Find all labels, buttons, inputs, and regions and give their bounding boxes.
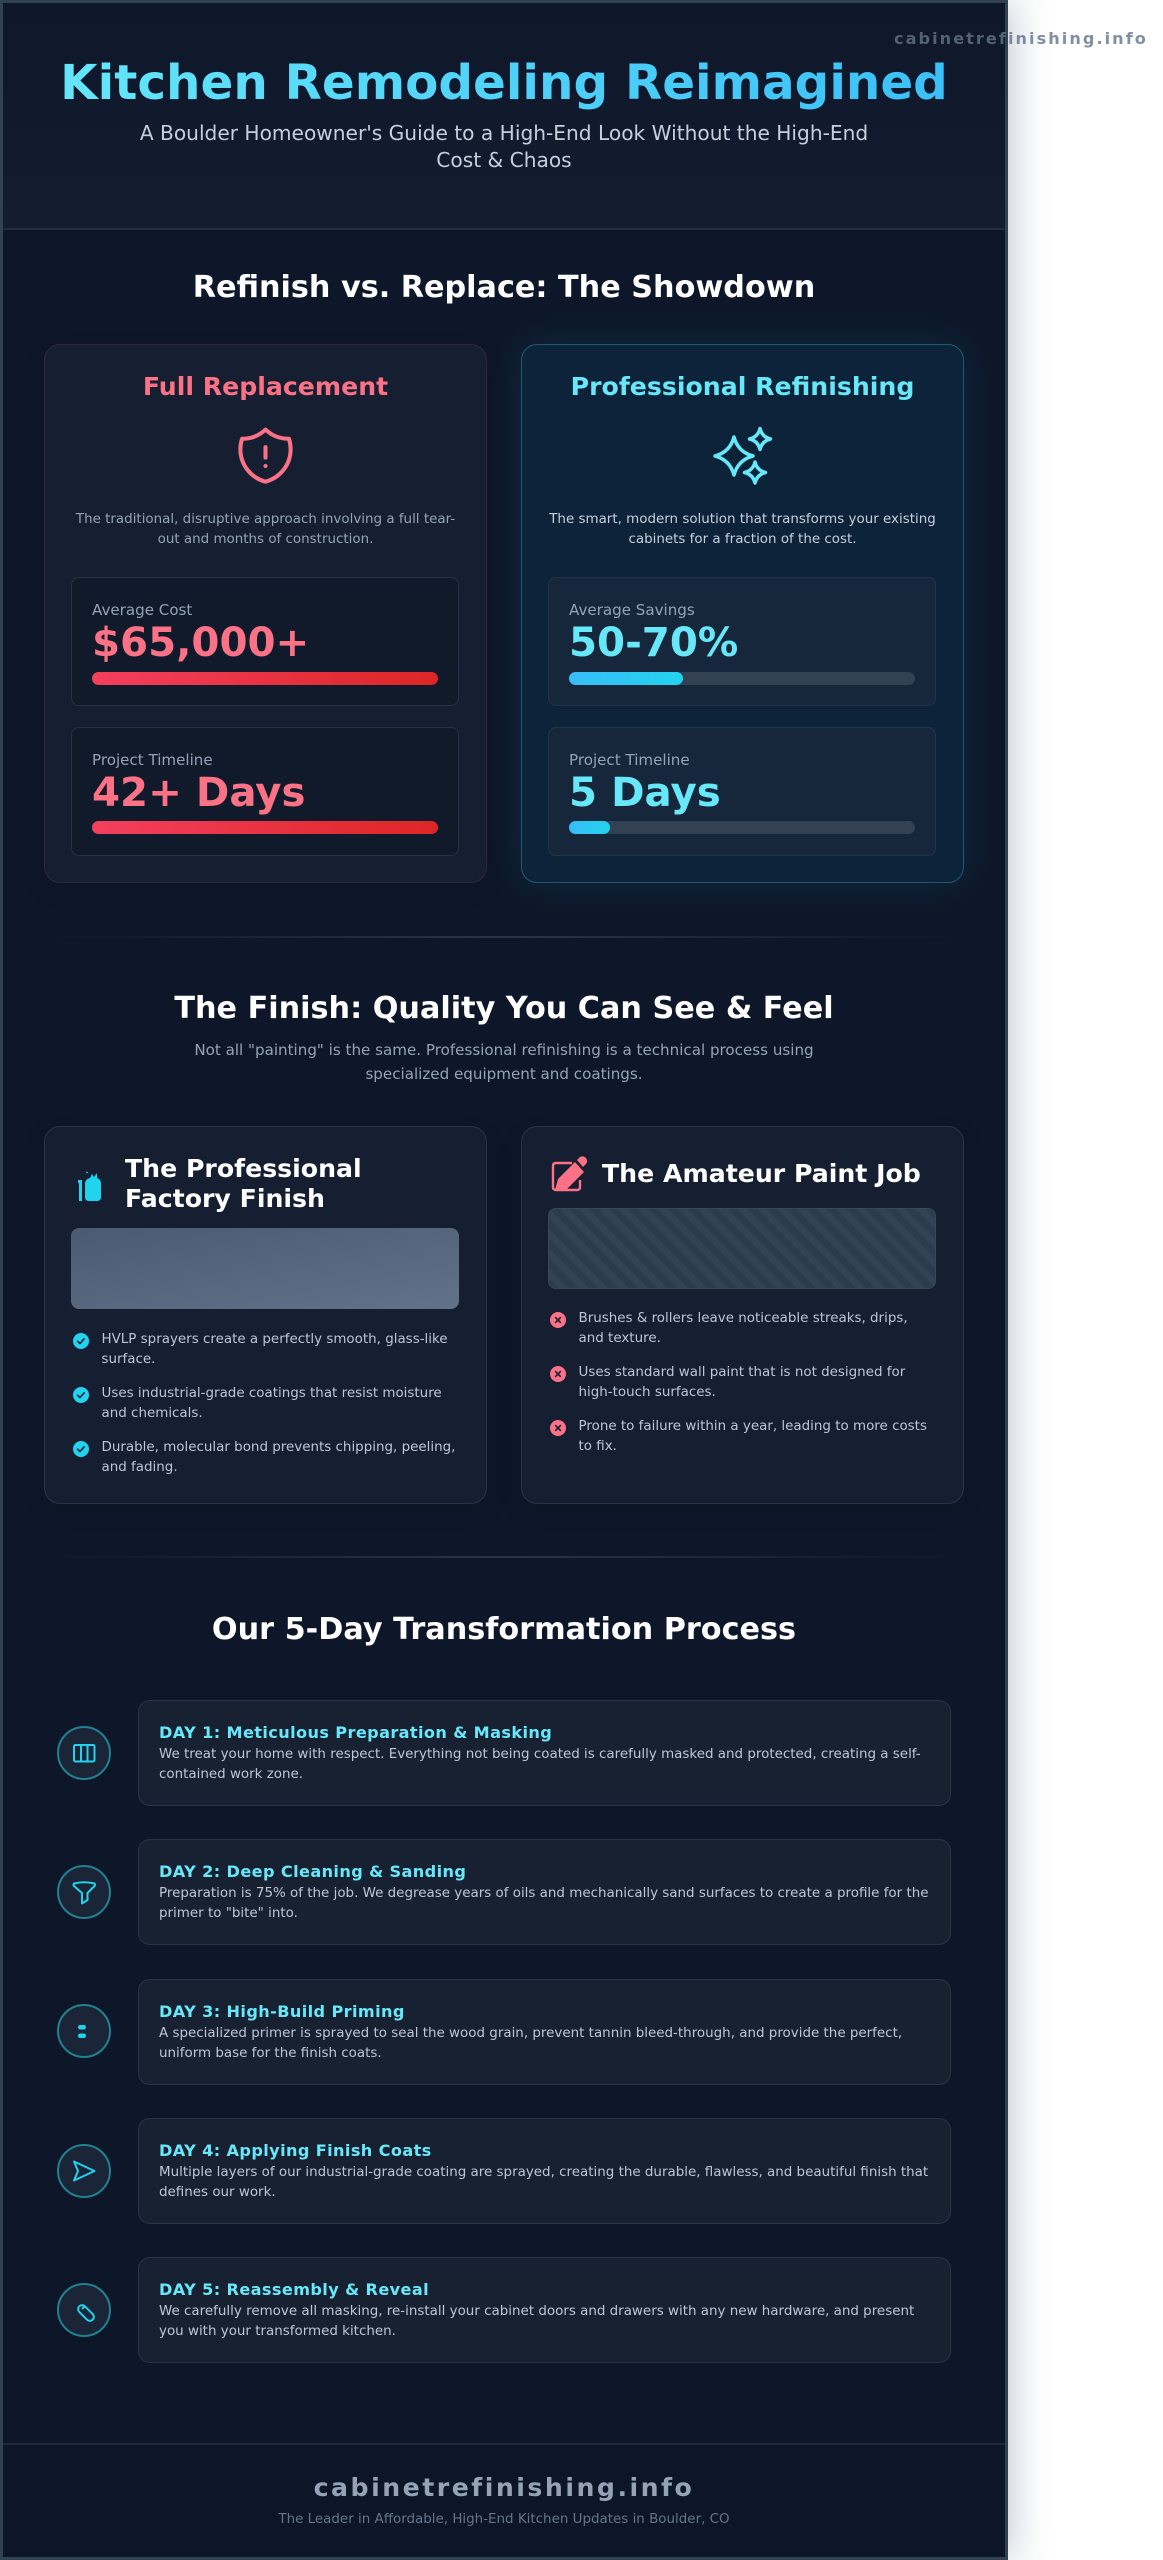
heading: the finish: The Finish: Quality You Can See & Feel (174, 991, 834, 1026)
list item (73, 1386, 442, 1421)
step text (159, 2304, 914, 2339)
step: day 2 (138, 1839, 951, 1945)
stat: average savings (548, 577, 936, 706)
step text (159, 2165, 928, 2200)
item text (578, 1365, 906, 1400)
step icon: day 1 (57, 1726, 111, 1780)
panel heading: The Amateur Paint Job (602, 1159, 921, 1188)
item text (102, 1440, 455, 1475)
icon: cross (550, 1312, 566, 1328)
step text: Preparation is 75% of the job. We degrease years of oils and mechanically sand surfaces to create a profile for the (159, 1886, 928, 1901)
item text: to fix. (578, 1439, 617, 1454)
step: day 5 (138, 2257, 951, 2363)
icon: check (73, 1387, 89, 1403)
list item (73, 1332, 448, 1367)
step icon: day 3 (57, 2004, 111, 2058)
step text: primer to "bite" into. (159, 1906, 298, 1921)
step text: you with your transformed kitchen. (159, 2324, 396, 2339)
panel heading: Full Replacement (143, 372, 388, 401)
item text: and chemicals. (102, 1406, 203, 1421)
value: 5 Days (569, 769, 721, 816)
icon: pencil on square (552, 1156, 587, 1192)
panel: amateur paint job (521, 1126, 964, 1504)
item text: and fading. (102, 1460, 178, 1475)
item text: HVLP sprayers create a perfectly smooth, glass-like (102, 1332, 448, 1347)
label: Project Timeline (569, 751, 690, 769)
stat: project timeline replacement (71, 727, 459, 856)
item text: Uses industrial-grade coatings that resist moisture (102, 1386, 442, 1401)
list item (550, 1311, 908, 1346)
item text: surface. (102, 1352, 155, 1367)
item text: Prone to failure within a year, leading to more costs (578, 1419, 927, 1434)
step text: defines our work. (159, 2185, 276, 2200)
description: cabinets for a fraction of the cost. (628, 532, 857, 547)
section intro (194, 1041, 814, 1082)
panel heading: Professional Refinishing (571, 372, 914, 401)
item text: high-touch surfaces. (578, 1385, 716, 1400)
panel heading (125, 1154, 362, 1213)
bar (569, 821, 915, 834)
sample swatch: smooth finish (71, 1228, 459, 1309)
panel: full replacement (44, 344, 487, 883)
section intro: Not all "painting" is the same. Professional refinishing is a technical process using (194, 1041, 814, 1059)
step: day 1 (138, 1700, 951, 1806)
panel heading: The Professional (125, 1154, 362, 1183)
label: Average Cost (92, 601, 192, 619)
item text (578, 1311, 908, 1346)
subtitle: A Boulder Homeowner's Guide to a High-End Look Without the High-End (140, 121, 868, 145)
subtitle: Cost & Chaos (436, 148, 572, 172)
step text: We carefully remove all masking, re-install your cabinet doors and drawers with any new hardware, and present (159, 2304, 914, 2319)
step text: Multiple layers of our industrial-grade coating are sprayed, creating the durable, flawless, and beautiful finish that (159, 2165, 928, 2180)
label: Project Timeline (92, 751, 213, 769)
description: The smart, modern solution that transforms your existing (549, 512, 936, 527)
bar (569, 672, 915, 685)
description (549, 512, 936, 547)
step text (159, 2026, 902, 2061)
step text (159, 1886, 928, 1921)
sample swatch: streaky finish (548, 1208, 936, 1289)
item text: Durable, molecular bond prevents chipping, peeling, (102, 1440, 455, 1455)
step text: contained work zone. (159, 1767, 303, 1782)
watermark: cabinetrefinishing.info (894, 29, 1148, 48)
step icon: day 4 (57, 2144, 111, 2198)
panel: professional finish (44, 1126, 487, 1504)
icon: check (73, 1441, 89, 1457)
value: $65,000+ (92, 619, 309, 666)
footer tagline: The Leader in Affordable, High-End Kitchen Updates in Boulder, CO (278, 2512, 730, 2527)
heading: showdown: Refinish vs. Replace: The Showdown (193, 270, 815, 305)
value: 42+ Days (92, 769, 306, 816)
stat: average cost (71, 577, 459, 706)
description: The traditional, disruptive approach involving a full tear- (76, 512, 455, 527)
item text: Brushes & rollers leave noticeable streaks, drips, (578, 1311, 908, 1326)
list item (550, 1419, 927, 1454)
list item (550, 1365, 906, 1400)
bar (92, 821, 438, 834)
description (76, 512, 455, 547)
step text: uniform base for the finish coats. (159, 2046, 382, 2061)
icon: cross (550, 1366, 566, 1382)
panel heading: Factory Finish (125, 1184, 325, 1213)
footer (3, 2443, 1005, 2557)
item text: and texture. (578, 1331, 661, 1346)
icon: sparkles (713, 426, 772, 485)
item text: Uses standard wall paint that is not designed for (578, 1365, 905, 1380)
icon: shield warning (238, 428, 293, 484)
icon: spray gun (78, 1172, 101, 1201)
step title: DAY 4: Applying Finish Coats (159, 2141, 432, 2160)
step icon: day 5 (57, 2283, 111, 2337)
step title: DAY 1: Meticulous Preparation & Masking (159, 1723, 552, 1742)
description: out and months of construction. (158, 532, 373, 547)
header band (3, 3, 1005, 230)
item text (102, 1386, 442, 1421)
list item (73, 1440, 455, 1475)
step text (159, 1747, 921, 1782)
step text: We treat your home with respect. Everything not being coated is carefully masked and protected, creating a self- (159, 1747, 921, 1762)
stat: project timeline refinishing (548, 727, 936, 856)
step: day 4 (138, 2118, 951, 2224)
value: 50-70% (569, 619, 738, 666)
step icon: day 2 (57, 1865, 111, 1919)
step title: DAY 2: Deep Cleaning & Sanding (159, 1862, 466, 1881)
step title: DAY 3: High-Build Priming (159, 2002, 405, 2021)
section intro: specialized equipment and coatings. (365, 1064, 643, 1082)
footer brand: cabinetrefinishing.info (314, 2473, 694, 2502)
step title: DAY 5: Reassembly & Reveal (159, 2280, 429, 2299)
title: Kitchen Remodeling Reimagined (60, 55, 948, 111)
panel: professional refinishing (521, 344, 964, 883)
bar (92, 672, 438, 685)
heading: process: Our 5-Day Transformation Process (212, 1612, 796, 1647)
icon: check (73, 1333, 89, 1349)
subtitle (140, 121, 868, 172)
label: Average Savings (569, 601, 695, 619)
item text (102, 1332, 448, 1367)
icon: cross (550, 1420, 566, 1436)
item text (578, 1419, 927, 1454)
step text: A specialized primer is sprayed to seal the wood grain, prevent tannin bleed-through, and provide the perfect, (159, 2026, 902, 2041)
step: day 3 (138, 1979, 951, 2085)
